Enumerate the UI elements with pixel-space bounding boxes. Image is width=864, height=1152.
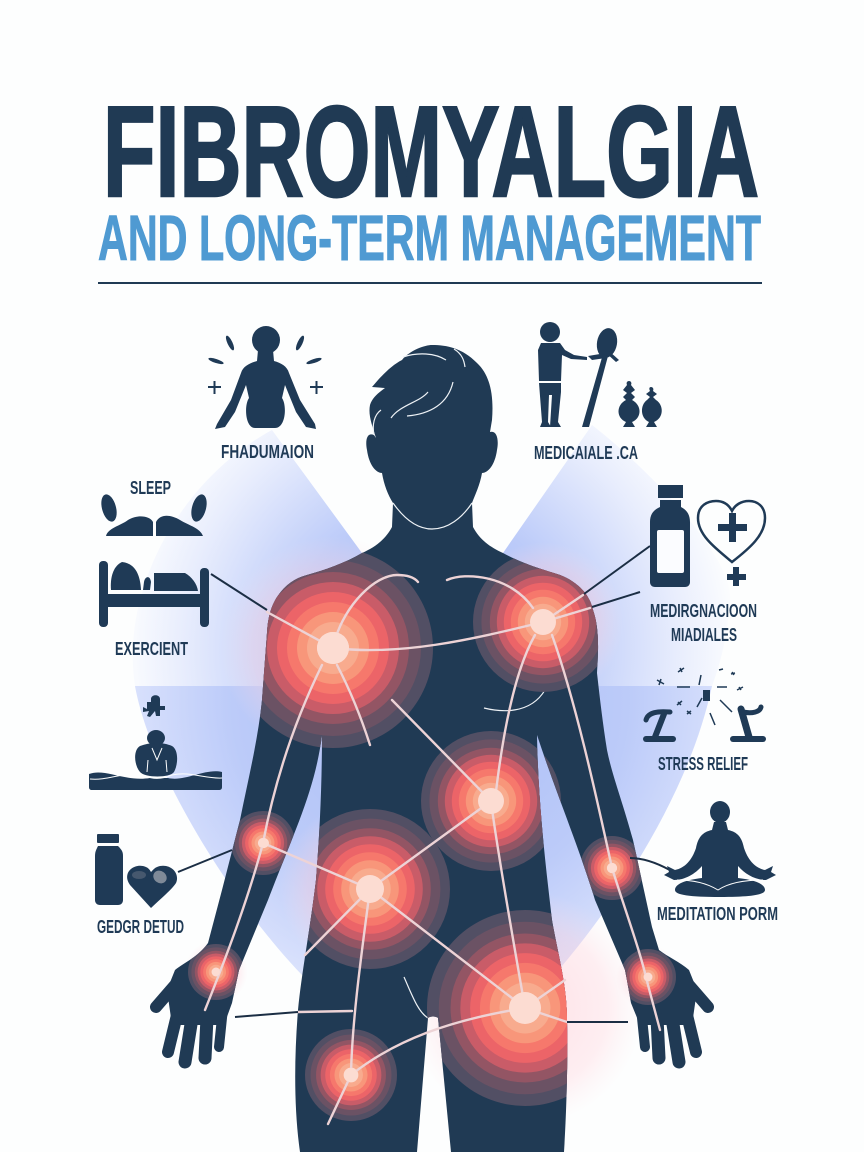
- body silhouette: [167, 345, 697, 1152]
- pain spot: left elbow: [231, 811, 295, 875]
- nerve lines: [205, 575, 660, 1124]
- pain spot: right hip: [427, 910, 568, 1106]
- title rule: [98, 282, 762, 284]
- icon: stress relief burst: [646, 668, 763, 739]
- pain spot: left shoulder: [260, 552, 433, 748]
- icon: meditation figure: [664, 801, 776, 897]
- pain spots: [188, 548, 676, 1121]
- icon: medicine bottle and heart: [650, 485, 765, 587]
- dark connector lines to icons: [178, 546, 675, 1022]
- label: MEDITATION PORM: MEDITATION PORM: [657, 904, 778, 924]
- label: MIADIALES: MIADIALES: [671, 625, 737, 645]
- label: EXERCIENT: EXERCIENT: [115, 639, 188, 659]
- pain spot: right wrist: [620, 949, 676, 1005]
- icon: bottle and heart: [95, 834, 177, 908]
- label: GEDGR DETUD: GEDGR DETUD: [97, 917, 184, 937]
- icon: body on mattress: [89, 695, 222, 790]
- icon: pillows: [99, 493, 209, 536]
- label: MEDIRGNACIOON: MEDIRGNACIOON: [650, 601, 757, 621]
- background blue glow: [133, 425, 730, 980]
- hair and neck highlights: [373, 349, 545, 1018]
- spot centres: [212, 609, 652, 1082]
- label: STRESS RELIEF: STRESS RELIEF: [658, 754, 748, 774]
- pain spot: abdomen: [421, 731, 561, 871]
- pain spot: right shoulder: [473, 558, 598, 692]
- icon: person with mirror and vases: [538, 322, 662, 427]
- icon: bed: [99, 561, 209, 627]
- label: SLEEP: SLEEP: [130, 478, 171, 498]
- label: FHADUMAION: FHADUMAION: [221, 442, 314, 462]
- pain spot: waist: [308, 809, 450, 969]
- icon: seated person (FHADUMAION): [208, 326, 323, 429]
- pain spot: left wrist: [188, 944, 244, 1000]
- title block: [98, 80, 762, 284]
- pain spot: right elbow: [580, 836, 644, 900]
- pain spot: left thigh: [305, 1029, 397, 1121]
- pink glow outside the body: [184, 536, 680, 1126]
- label: MEDICAIALE .CA: MEDICAIALE .CA: [534, 443, 638, 463]
- hands: thumbs and fingers: [156, 977, 708, 1062]
